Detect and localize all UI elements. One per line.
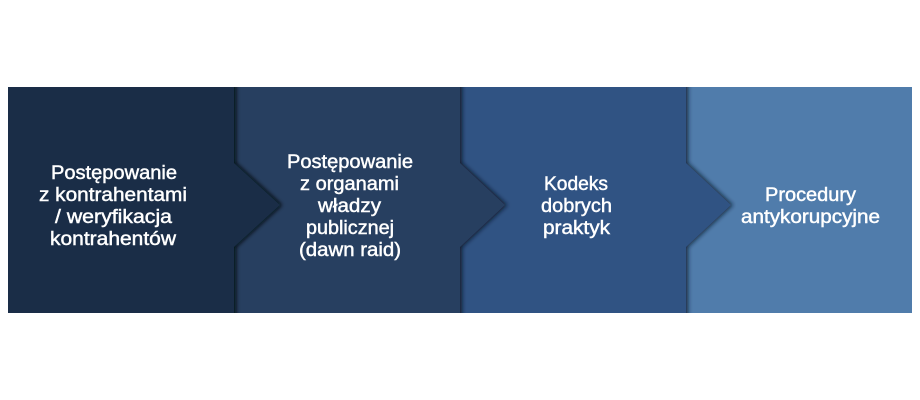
panel: step 2 bbox=[234, 80, 507, 320]
label: step 3 bbox=[541, 174, 612, 239]
label: step 3: Kodeks bbox=[544, 174, 608, 195]
label: step 2: z organami bbox=[300, 174, 399, 195]
label: step 2: publicznej bbox=[306, 218, 394, 239]
label: step 4: antykorupcyjne bbox=[741, 207, 880, 228]
label: step 3: praktyk bbox=[543, 218, 611, 239]
label: step 4: Procedury bbox=[765, 185, 857, 206]
label: step 2: (dawn raid) bbox=[299, 240, 401, 261]
label: step 1: Postępowanie bbox=[51, 163, 177, 184]
label: step 1: z kontrahentami bbox=[39, 185, 187, 206]
label: step 1 bbox=[39, 163, 187, 250]
label: step 1: kontrahentów bbox=[50, 229, 176, 250]
panel: step 1 bbox=[8, 80, 282, 320]
label: step 4 bbox=[741, 185, 880, 228]
label: step 2 bbox=[287, 152, 413, 261]
process chevron diagram bbox=[8, 87, 912, 313]
label: step 2: władzy bbox=[317, 196, 382, 217]
panel: step 4 bbox=[686, 87, 912, 313]
label: step 2: Postępowanie bbox=[287, 152, 413, 173]
label: step 1: / weryfikacja bbox=[55, 207, 172, 228]
panel: step 3 bbox=[460, 80, 733, 320]
label: step 3: dobrych bbox=[541, 196, 612, 217]
